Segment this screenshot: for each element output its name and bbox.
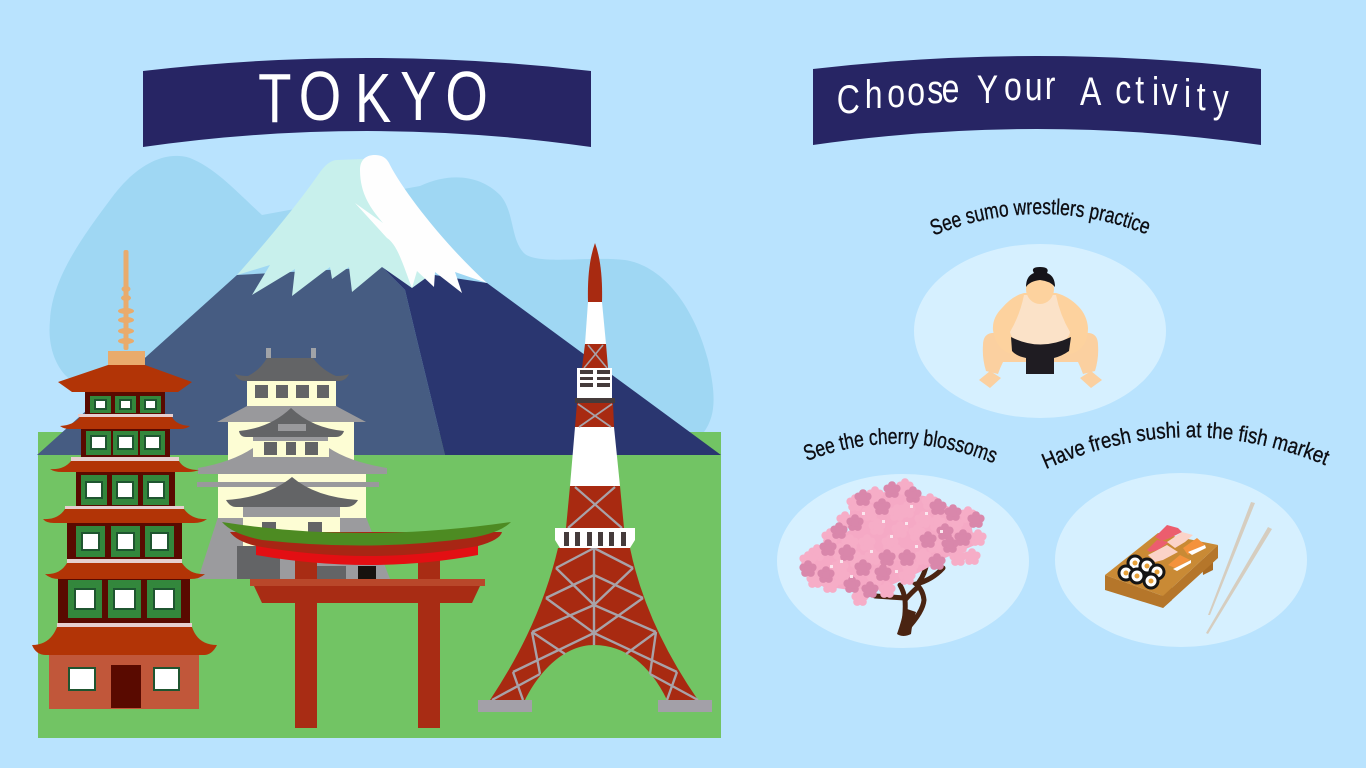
castle [197, 348, 390, 579]
tower top lattice [584, 345, 607, 368]
tower lower legs [490, 548, 698, 700]
pagoda spire [118, 250, 134, 350]
tree branches [875, 562, 943, 630]
cherry label: See the cherry blossoms [804, 428, 997, 462]
activity: sushi [1041, 421, 1330, 647]
pagoda walls [58, 392, 190, 623]
castle lower strip [243, 507, 340, 517]
pagoda windows [76, 401, 173, 608]
castle stone base [198, 517, 390, 579]
activity: cherry blossoms [777, 428, 1029, 648]
castle middle windows [264, 442, 318, 455]
tower middle lattice [568, 487, 622, 528]
wrestler apron [1026, 346, 1054, 374]
castle antennae [266, 348, 316, 358]
snow cap white [355, 155, 487, 293]
castle middle gable [239, 408, 344, 437]
light blossoms [799, 478, 987, 606]
green ground [38, 432, 721, 738]
mountain shaded left side [37, 267, 445, 455]
castle eave strip [197, 482, 379, 487]
activity banner [813, 56, 1261, 145]
sushi label: Have fresh sushi at the fish market [1041, 421, 1330, 469]
castle top roof [235, 358, 349, 381]
pagoda roofs [32, 365, 217, 655]
tower lattice [492, 548, 698, 700]
wrestler head [1026, 274, 1054, 304]
mountain dark right side [382, 267, 721, 455]
castle lower gable [226, 477, 358, 507]
pagoda door [111, 665, 141, 708]
pagoda [32, 250, 217, 709]
torii crossbar cap [250, 579, 485, 586]
banner shape [143, 58, 591, 147]
castle lower wall [218, 472, 366, 518]
tower feet [478, 700, 712, 712]
wrestler hair [1026, 267, 1055, 287]
tower red spire [588, 243, 602, 302]
wrestler belly [1010, 295, 1070, 346]
castle gate opening [358, 566, 376, 579]
torii lower crossbar [254, 586, 480, 603]
dark blossoms [799, 481, 985, 598]
castle gate blocks [237, 546, 346, 579]
main deck windows [564, 532, 626, 546]
background hills [50, 156, 714, 440]
tower observation cabin [577, 368, 612, 398]
cabin window bars [580, 370, 610, 387]
wrestler legs [983, 333, 1098, 374]
cherry tree icon [799, 478, 987, 636]
torii gate [222, 522, 511, 728]
torii red beam [256, 544, 478, 565]
sumo label: See sumo wrestlers practice [930, 198, 1150, 234]
title banner [143, 58, 591, 147]
blossom highlights [830, 505, 943, 578]
castle bottom windows [262, 522, 322, 532]
sumo ellipse [914, 244, 1166, 418]
torii green roof [222, 522, 511, 546]
mountain [37, 155, 721, 455]
board legs [1160, 553, 1213, 608]
pale nigiri [1148, 532, 1193, 562]
salmon nigiri [1168, 538, 1205, 568]
tower white band [570, 427, 620, 486]
castle gable plate [278, 424, 306, 431]
castle top wall [247, 378, 336, 408]
cabin base [575, 398, 615, 403]
snow cap pale [237, 159, 430, 296]
maki rolls [1118, 554, 1166, 590]
tower white mast [585, 302, 606, 344]
castle second roof [217, 406, 366, 422]
torii dark red band [230, 532, 502, 556]
tower upper red section [575, 403, 614, 427]
sushi rice highlights [1173, 545, 1206, 571]
tree trunk base [897, 608, 916, 636]
castle third roof [198, 448, 387, 474]
pagoda base [49, 655, 199, 709]
tuna nigiri [1147, 525, 1182, 552]
banner shape [813, 56, 1261, 145]
cherry ellipse [777, 474, 1029, 648]
pagoda base window panes [70, 669, 178, 689]
torii pillars [295, 560, 440, 728]
tower upper lattice [578, 404, 612, 427]
activity heading: Choose Your Activity [837, 63, 1230, 122]
tokyo tower [478, 243, 712, 712]
wrestler belt [1011, 337, 1071, 358]
tower top red section [582, 344, 608, 368]
pagoda white strips [57, 414, 192, 627]
pagoda base windows [68, 667, 180, 691]
pagoda finial base [108, 351, 145, 365]
blossom mass [808, 490, 975, 590]
title text: TOKYO [258, 58, 488, 138]
castle top windows [255, 385, 329, 398]
sushi platter icon [1105, 525, 1218, 608]
castle gable strip [253, 437, 328, 441]
activity: sumo wrestlers [914, 198, 1166, 418]
sumo wrestler icon [979, 267, 1102, 388]
board top [1105, 533, 1218, 596]
tower main deck [555, 528, 635, 548]
sushi ellipse [1055, 473, 1307, 647]
wrestler feet [979, 371, 1102, 388]
chopsticks icon [1206, 502, 1272, 634]
castle bottom wall [243, 517, 340, 547]
wrestler body [993, 293, 1088, 358]
tower middle red section [566, 486, 624, 528]
board side [1105, 545, 1218, 608]
pagoda green panels [68, 396, 181, 618]
castle middle wall [228, 421, 354, 463]
pagoda window frames [74, 399, 175, 610]
